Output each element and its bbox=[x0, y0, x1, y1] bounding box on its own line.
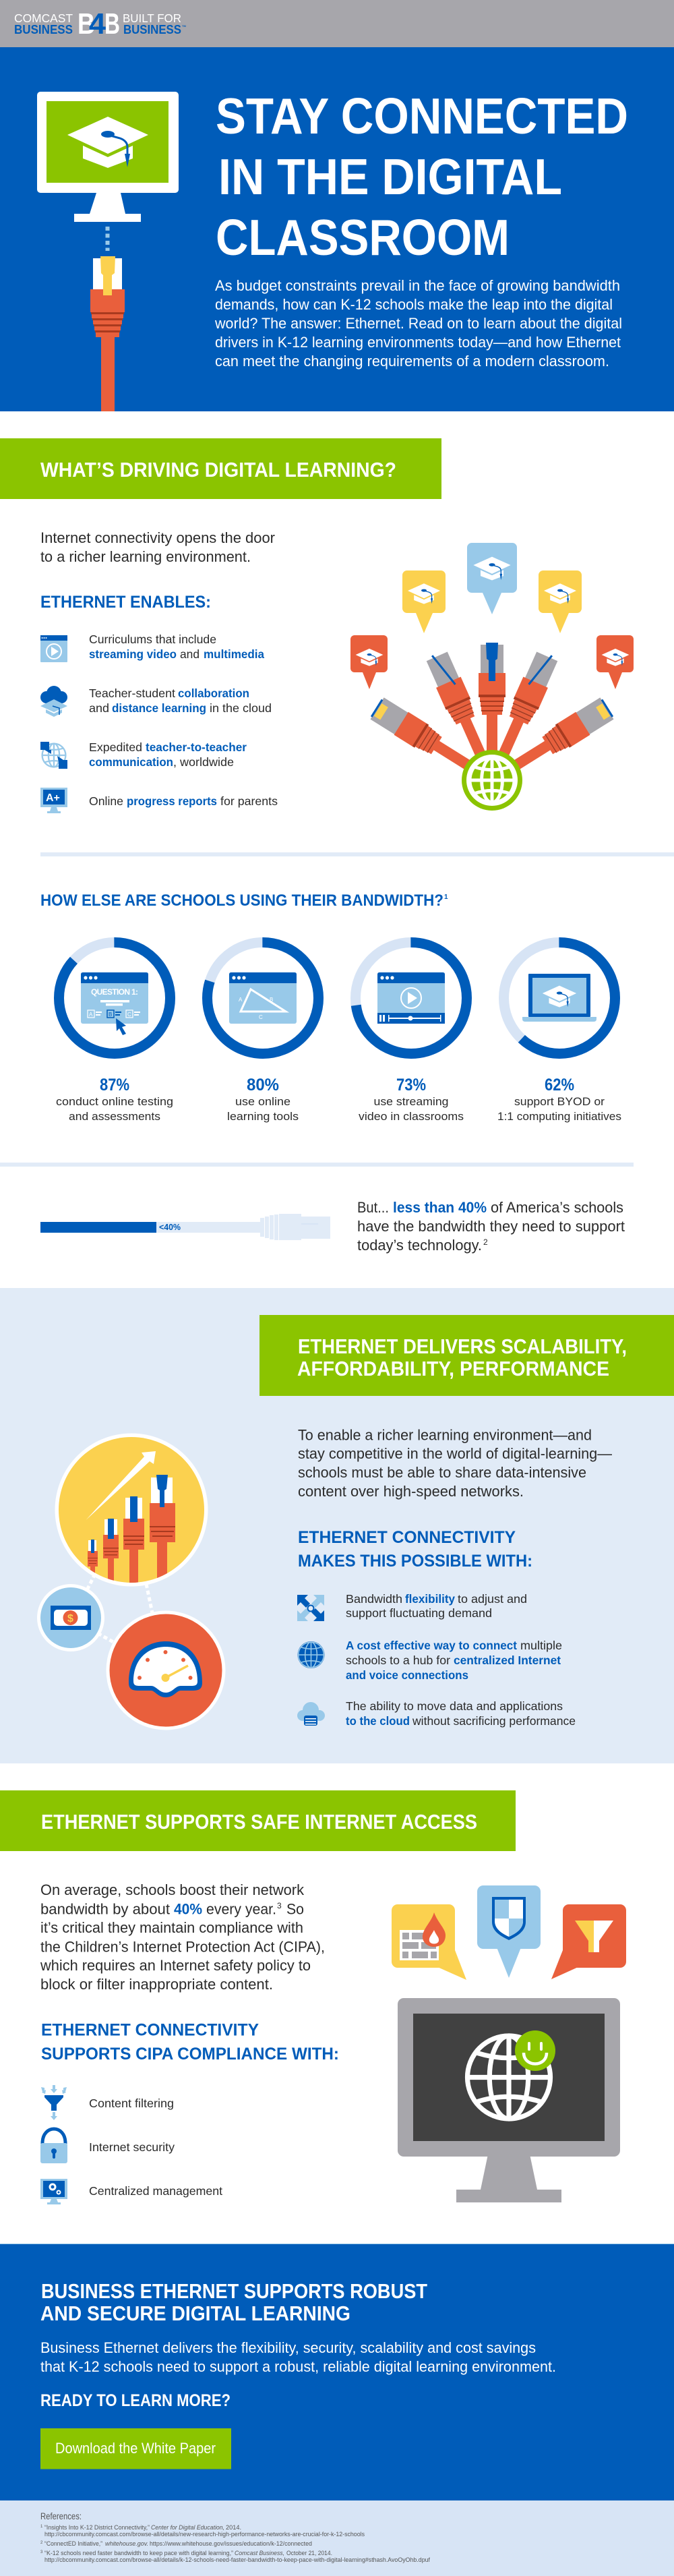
chart: under 40% cable bar bbox=[40, 1214, 330, 1240]
label: 62%: 1:1 computing initiatives bbox=[497, 1110, 621, 1123]
text: less than 40% of schools: But... bbox=[357, 1199, 389, 1216]
icon: monitor with A+ bbox=[40, 788, 67, 813]
reference 3: 3 bbox=[40, 2550, 43, 2554]
text: cost effective: and voice connections bbox=[346, 1668, 468, 1682]
illustration: scaling plugs, money and speed circles bbox=[37, 1434, 225, 1730]
text: less than 40% of schools: have the bandwidth they need to support bbox=[357, 1218, 625, 1235]
text: teacher-to-teacher communication bbox=[89, 740, 247, 769]
intro text: internet connectivity bbox=[40, 529, 275, 565]
text: cost effective: A cost effective way to connect bbox=[346, 1639, 517, 1652]
subheading: makes this possible bbox=[298, 1528, 532, 1571]
subheading: ethernet enables: ETHERNET ENABLES: bbox=[40, 593, 211, 612]
bubble: yellow left bbox=[402, 570, 446, 633]
illustration: plugs fanning from globe with cap bubbles bbox=[350, 543, 634, 811]
text: streaming video and multimedia: streaming video bbox=[89, 647, 177, 661]
text: progress reports: Online bbox=[89, 794, 123, 808]
intro text: internet connectivity: to a richer learning environment. bbox=[40, 548, 251, 565]
text: flexibility: Bandwidth bbox=[346, 1592, 402, 1606]
label: 62% bbox=[497, 1076, 621, 1123]
dotted link bbox=[105, 227, 109, 251]
text: bandwidth growth and CIPA: which requires an Internet safety policy to bbox=[40, 1957, 311, 1974]
logo: Comcast Business B4B: TM bbox=[182, 24, 186, 28]
bubble: firewall bbox=[392, 1904, 466, 1980]
stat: 80 percent bbox=[208, 943, 318, 1123]
hero intro text: drivers in K-12 learning environments today—and how Ethernet bbox=[215, 334, 621, 351]
label: 87% bbox=[56, 1076, 173, 1123]
text: less than 40% of schools bbox=[357, 1199, 625, 1254]
label: 87%: conduct online testing bbox=[56, 1095, 173, 1108]
title: IN THE DIGITAL bbox=[218, 148, 562, 205]
ring chart: 73% bbox=[356, 943, 466, 1053]
icon: learning tools window: A bbox=[239, 997, 243, 1003]
heading: business ethernet: BUSINESS ETHERNET SUPPORTS ROBUST bbox=[41, 2279, 427, 2303]
icon: cloud with cap bbox=[40, 686, 67, 717]
text: cta body: that K-12 schools need to support a robust, reliable digital learning environment. bbox=[40, 2358, 556, 2375]
heading: ethernet delivers: AFFORDABILITY, PERFORMANCE bbox=[297, 1357, 609, 1380]
divider bbox=[0, 1163, 634, 1167]
text: richer learning environment: schools must be able to share data-intensive bbox=[298, 1464, 586, 1481]
ring chart: 87% bbox=[59, 943, 170, 1053]
text: bandwidth growth and CIPA: block or filter inappropriate content. bbox=[40, 1976, 273, 1993]
text: cta body bbox=[40, 2339, 556, 2375]
button: download the white paper bbox=[40, 2428, 231, 2469]
label: 73%: 73% bbox=[396, 1076, 426, 1094]
text: teacher-to-teacher communication: Expedited bbox=[89, 740, 142, 754]
chart: under 40% cable bar: <40% bbox=[159, 1222, 181, 1232]
top header bar bbox=[0, 0, 674, 47]
reference 1: 2014. bbox=[226, 2524, 241, 2531]
circle: speed gauge bbox=[106, 1610, 225, 1730]
reference 1 bbox=[40, 2524, 365, 2538]
text: progress reports: for parents bbox=[220, 794, 278, 808]
icon: monitor with gears bbox=[40, 2179, 67, 2204]
plug: inner right bbox=[491, 649, 561, 761]
heading: business ethernet: AND SECURE DIGITAL LEARNING bbox=[40, 2302, 350, 2325]
hero intro text: demands, how can K-12 schools make the leap into the digital bbox=[215, 296, 613, 313]
icon: dark globe bbox=[298, 1641, 325, 1668]
logo: Comcast Business B4B: 4 bbox=[89, 7, 106, 40]
text: streaming video and multimedia: and bbox=[180, 647, 200, 661]
logo: Comcast Business B4B: BUSINESS bbox=[123, 23, 181, 36]
illustration: secure monitor with bubbles bbox=[392, 1885, 626, 2202]
text: progress reports: progress reports bbox=[127, 794, 217, 808]
ring chart: 80% bbox=[208, 943, 318, 1053]
circle: dollar bill: $ bbox=[67, 1613, 73, 1624]
icon: online test window: QUESTION 1: bbox=[91, 987, 138, 997]
text: less than 40% of schools: less than 40% bbox=[393, 1199, 487, 1216]
text: bandwidth growth and CIPA: every year. bbox=[206, 1900, 276, 1918]
title: CLASSROOM bbox=[216, 209, 510, 266]
text: bandwidth growth and CIPA: So bbox=[286, 1900, 304, 1918]
text: teacher-to-teacher communication: communication bbox=[89, 755, 173, 769]
reference 3: October 21, 2014. bbox=[286, 2550, 332, 2557]
label: 80%: 80% bbox=[247, 1076, 279, 1094]
bubble: funnel bbox=[551, 1904, 626, 1979]
icon: content filter funnel bbox=[41, 2085, 67, 2120]
text: collaboration and distance learning: and bbox=[89, 701, 109, 715]
button: download the white paper: Download the White Paper bbox=[55, 2440, 216, 2457]
subheading: supports CIPA compliance bbox=[41, 2020, 339, 2063]
reference 1: “Insights Into K-12 District Connectivity,” bbox=[44, 2524, 150, 2531]
heading: safe internet access bbox=[0, 1790, 516, 1851]
bubble: orange left bbox=[350, 635, 388, 689]
logo: Comcast Business B4B: COMCAST bbox=[14, 11, 73, 25]
text: streaming video and multimedia: multimedia bbox=[204, 647, 264, 661]
icon: ethernet plug bbox=[90, 256, 125, 411]
reference 1: 1 bbox=[40, 2525, 43, 2529]
text: less than 40% of schools: today’s technology. bbox=[357, 1237, 482, 1254]
text: flexibility: to adjust and bbox=[458, 1592, 527, 1606]
bubble: shield bbox=[477, 1885, 541, 1978]
stat: 62 percent bbox=[497, 943, 621, 1123]
label: 73%: video in classrooms bbox=[359, 1110, 464, 1123]
heading: ethernet delivers: ETHERNET DELIVERS SCALABILITY, bbox=[298, 1335, 627, 1358]
icon: online test window: A bbox=[89, 1012, 93, 1018]
text: teacher-to-teacher communication: , worldwide bbox=[173, 755, 234, 769]
text: flexibility bbox=[346, 1592, 527, 1620]
text: cta body: Business Ethernet delivers the flexibility, security, scalability and cost savings bbox=[40, 2339, 536, 2356]
icon: padlock bbox=[40, 2129, 67, 2163]
icon: learning tools window bbox=[229, 972, 297, 1024]
hero intro text bbox=[214, 277, 622, 370]
text: collaboration and distance learning: collaboration bbox=[178, 686, 249, 700]
panel: scalability, affordability, performance bbox=[0, 1288, 674, 1763]
stat: 87 percent bbox=[56, 943, 173, 1123]
heading: what's driving digital learning bbox=[0, 438, 441, 499]
text: streaming video and multimedia: Curriculums that include bbox=[89, 633, 216, 646]
text: to the cloud bbox=[346, 1699, 576, 1728]
icon: expand arrows bbox=[297, 1595, 324, 1621]
reference 3: http://cbcommunity.comcast.com/browse-all/details/k-12-schools-need-faster-bandwidth-to-keep-pace-with-digital-learning#sthash.AvoOyOhb.dpuf bbox=[44, 2556, 430, 2564]
icon: cloud database bbox=[297, 1702, 325, 1726]
logo: Comcast Business B4B: B bbox=[78, 7, 95, 40]
hero intro text: As budget constraints prevail in the face of growing bandwidth bbox=[215, 277, 620, 294]
text: internet security: Internet security bbox=[89, 2140, 175, 2154]
text: collaboration and distance learning: Teacher-student bbox=[89, 686, 175, 700]
text: to the cloud: to the cloud bbox=[346, 1714, 410, 1728]
text: bandwidth growth and CIPA: On average, schools boost their network bbox=[40, 1881, 305, 1898]
reference 2: whitehouse.gov. bbox=[105, 2540, 148, 2548]
text: flexibility: flexibility bbox=[405, 1592, 455, 1606]
text: flexibility: support fluctuating demand bbox=[346, 1606, 492, 1620]
dotted links between circles bbox=[87, 1574, 152, 1643]
icon: monitor with A+: A+ bbox=[46, 792, 60, 804]
icon: globe with speech bubbles bbox=[40, 742, 67, 769]
text: cost effective: multiple bbox=[520, 1639, 562, 1652]
label: 73% bbox=[359, 1076, 464, 1123]
reference 2: https://www.whitehouse.gov/issues/education/k-12/connected bbox=[150, 2540, 312, 2548]
label: 80%: learning tools bbox=[227, 1110, 299, 1123]
reference 1: http://cbcommunity.comcast.com/browse-all/details/new-research-high-performance-networks-are-crucial-for-k-12-schools bbox=[44, 2531, 365, 2538]
subheading: supports CIPA compliance: ETHERNET CONNECTIVITY bbox=[41, 2020, 259, 2039]
hero intro text: world? The answer: Ethernet. Read on to learn about the digital bbox=[214, 315, 622, 332]
icon: learning tools window: B bbox=[270, 997, 273, 1003]
text: teacher-to-teacher communication: teacher-to-teacher bbox=[146, 740, 247, 754]
circle: growing plugs bbox=[55, 1434, 208, 1591]
ring chart: 62% bbox=[504, 943, 615, 1053]
bubble: yellow right bbox=[539, 570, 582, 633]
logo: Comcast Business B4B: BUSINESS bbox=[14, 23, 73, 36]
hero intro text: can meet the changing requirements of a modern classroom. bbox=[215, 353, 609, 370]
reference 2: “ConnectED Initiative,” bbox=[44, 2540, 102, 2548]
text: richer learning environment: stay competitive in the world of digital-learning— bbox=[298, 1445, 612, 1462]
references heading: References: bbox=[40, 2511, 82, 2521]
icon: learning tools window: C bbox=[259, 1014, 263, 1020]
reference 3 bbox=[40, 2550, 430, 2564]
text: cost effective: centralized Internet bbox=[454, 1653, 561, 1667]
text: bandwidth growth and CIPA bbox=[40, 1881, 325, 1993]
panel: hero bbox=[0, 47, 674, 411]
text: collaboration and distance learning: in the cloud bbox=[210, 701, 272, 715]
icon: monitor with graduation cap bbox=[37, 92, 179, 222]
logo: Comcast Business B4B: B bbox=[104, 7, 120, 40]
subheading: makes this possible: ETHERNET CONNECTIVITY bbox=[298, 1528, 516, 1547]
label: 73%: use streaming bbox=[373, 1095, 449, 1108]
title: STAY CONNECTED bbox=[216, 88, 628, 144]
label: 62%: support BYOD or bbox=[514, 1095, 605, 1108]
heading: how else are schools using bandwidth: HOW ELSE ARE SCHOOLS USING THEIR BANDWIDTH? bbox=[40, 891, 443, 910]
text: cost effective bbox=[346, 1639, 562, 1682]
icon: laptop with cap bbox=[522, 974, 596, 1022]
label: 87%: 87% bbox=[100, 1076, 129, 1094]
heading: ready to learn more: READY TO LEARN MORE? bbox=[40, 2391, 231, 2410]
text: bandwidth growth and CIPA: 40% bbox=[174, 1900, 202, 1918]
circle: dollar bill bbox=[37, 1584, 104, 1651]
icon: green globe bbox=[462, 750, 522, 811]
panel: references bbox=[0, 2500, 674, 2576]
reference 2: 2 bbox=[40, 2541, 43, 2545]
label: 80%: use online bbox=[235, 1095, 290, 1108]
label: 87%: and assessments bbox=[69, 1110, 160, 1123]
subheading: supports CIPA compliance: SUPPORTS CIPA COMPLIANCE WITH: bbox=[41, 2045, 339, 2063]
plug: far right bbox=[508, 696, 615, 778]
text: bandwidth growth and CIPA: the Children’s Internet Protection Act (CIPA), bbox=[40, 1938, 325, 1956]
heading: what's driving digital learning: WHAT’S DRIVING DIGITAL LEARNING? bbox=[40, 458, 396, 481]
text: bandwidth growth and CIPA: bandwidth by about bbox=[40, 1900, 170, 1918]
text: bandwidth growth and CIPA: 3 bbox=[277, 1901, 282, 1910]
text: streaming video and multimedia bbox=[89, 633, 264, 661]
text: richer learning environment: content over high-speed networks. bbox=[298, 1483, 524, 1500]
title bbox=[216, 88, 628, 266]
text: progress reports bbox=[89, 794, 278, 808]
bubble: orange right bbox=[596, 635, 634, 689]
heading: safe internet access: ETHERNET SUPPORTS SAFE INTERNET ACCESS bbox=[41, 1810, 477, 1834]
label: 62%: 62% bbox=[545, 1076, 574, 1094]
text: less than 40% of schools: 2 bbox=[483, 1237, 488, 1247]
logo: Comcast Business B4B bbox=[14, 7, 186, 40]
text: richer learning environment bbox=[298, 1427, 612, 1500]
intro text: internet connectivity: Internet connectivity opens the door bbox=[40, 529, 275, 546]
stat: 73 percent bbox=[356, 943, 466, 1123]
reference 3: “K-12 schools need faster bandwidth to keep pace with digital learning,” bbox=[44, 2550, 233, 2557]
reference 3: Comcast Business, bbox=[235, 2550, 284, 2557]
heading: how else are schools using bandwidth: 1 bbox=[444, 894, 448, 901]
text: collaboration and distance learning: distance learning bbox=[112, 701, 206, 715]
icon: online test window: C bbox=[127, 1012, 131, 1018]
text: to the cloud: The ability to move data and applications bbox=[346, 1699, 563, 1713]
icon: streaming video window bbox=[377, 972, 445, 1024]
heading: ethernet delivers bbox=[259, 1315, 674, 1396]
bubble: blue centre bbox=[467, 543, 517, 614]
text: less than 40% of schools: of America’s schools bbox=[491, 1199, 623, 1216]
plug: centre bbox=[479, 643, 506, 753]
icon: smiley bbox=[515, 2030, 555, 2071]
plug: inner left bbox=[423, 649, 493, 761]
icon: streaming video page bbox=[40, 635, 67, 662]
panel: call to action bbox=[0, 2244, 674, 2500]
text: bandwidth growth and CIPA: it’s critical they maintain compliance with bbox=[40, 1919, 303, 1936]
text: collaboration and distance learning bbox=[89, 686, 272, 715]
text: content filtering: Content filtering bbox=[89, 2097, 174, 2110]
text: centralized management: Centralized management bbox=[89, 2184, 222, 2198]
logo: Comcast Business B4B: BUILT FOR bbox=[123, 11, 181, 25]
heading: business ethernet bbox=[40, 2279, 427, 2325]
reference 2 bbox=[40, 2540, 312, 2548]
text: richer learning environment: To enable a richer learning environment—and bbox=[298, 1427, 592, 1443]
divider bbox=[40, 852, 674, 856]
reference 1: Center for Digital Education, bbox=[151, 2524, 224, 2531]
icon: online test window: B bbox=[109, 1012, 112, 1018]
icon: online test window bbox=[81, 972, 148, 1035]
text: to the cloud: without sacrificing performance bbox=[412, 1714, 576, 1728]
monitor bbox=[398, 1998, 620, 2202]
subheading: makes this possible: MAKES THIS POSSIBLE WITH: bbox=[298, 1552, 532, 1571]
icon: white globe bbox=[468, 2036, 550, 2119]
plug: far left bbox=[369, 696, 477, 778]
text: cost effective: schools to a hub for bbox=[346, 1653, 450, 1667]
label: 80% bbox=[227, 1076, 299, 1123]
